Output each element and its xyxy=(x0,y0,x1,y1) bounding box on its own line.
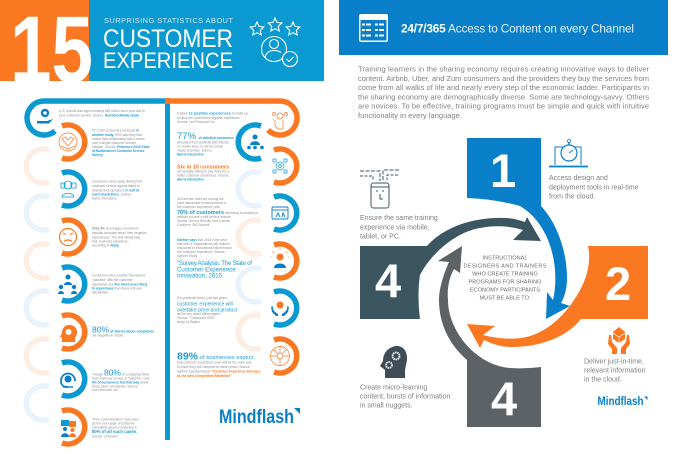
center text: ECONOMY PARTICIPANTS xyxy=(470,288,540,294)
text: customer experience will overtake: as the key brand differentiator. xyxy=(177,312,221,316)
icon: network target xyxy=(273,159,287,173)
text: six in 10: Six in 10 consumers xyxy=(177,164,229,170)
text: customer experience will overtake: overtake price and product xyxy=(177,308,238,314)
text: gartner says xyxy=(177,238,252,280)
text: customer experience will overtake: customer experience will xyxy=(177,302,233,308)
center text: INSTRUCTIONAL xyxy=(482,256,528,262)
text: self-service xyxy=(177,197,258,227)
text: only 4 percent: Only 4% of unhappy consumers xyxy=(92,226,139,230)
center text: WHO CREATE TRAINING xyxy=(472,272,538,278)
text: 80 percent superior xyxy=(92,368,150,392)
cycle: step 1 box and arrow xyxy=(467,138,570,319)
text: gartner says: resources to innovations that enhance xyxy=(177,246,232,250)
text: 77 percent: media channels. Source: xyxy=(177,148,213,152)
icon: people check xyxy=(58,274,77,294)
text: 80 percent superior: those same companies. Source: xyxy=(92,384,139,388)
text: six in 10: Harris Interactive. xyxy=(177,178,205,182)
intro paragraph: come from all walks of life and nearly every step of the economic ladder. Participants in xyxy=(358,83,649,92)
cycle: left dark 4 box and arrow: 4 xyxy=(375,254,401,307)
text: self-service: website to have a self-service feature. xyxy=(177,215,232,219)
text: customer experience will overtake: study by Walker xyxy=(177,320,201,324)
cycle: lower grey 4 box and arrow xyxy=(438,246,541,427)
text: step 4 bottom: in small nuggets. xyxy=(360,402,413,410)
text: step 2 xyxy=(584,358,646,384)
text: step 4 bottom xyxy=(360,384,450,410)
text: gartner says: Customer Experience xyxy=(177,266,236,274)
center text xyxy=(464,256,547,302)
text: billion lost: U.S. brands lose approximately $62 billion each year due to xyxy=(59,109,145,113)
title: EXPERIENCE xyxy=(103,48,233,73)
cycle: step 1 box and arrow: 1 xyxy=(490,144,516,197)
text: step 1: deployment tools in real-time xyxy=(549,184,639,192)
text: gartner says: "Survey Analysis: The State of xyxy=(177,260,252,267)
title xyxy=(103,16,233,73)
icon: devices with arrows xyxy=(360,170,399,208)
text: billion lost: poor customer service. Source: NewVoiceMedia study. xyxy=(59,114,140,118)
serpentine path: right column xyxy=(165,98,297,440)
text: 63 percent: of Multichannel Customer Service xyxy=(92,149,145,153)
title: SURPRISING STATISTICS ABOUT xyxy=(104,16,233,25)
text: satisfied customers xyxy=(92,274,147,294)
text: 80 percent superior: Lee Resource Inc. xyxy=(92,388,118,392)
text: 63 percent: Survey xyxy=(92,153,103,157)
intro paragraph: the sharing economy are demographically diverse. Some are technology-savvy. Others xyxy=(358,92,649,102)
heading: 24/7/365 Access to Content on every Channel xyxy=(401,22,634,36)
text: gartner says: Innovation, 2015. xyxy=(177,272,224,280)
intro paragraph: functionality in every language. xyxy=(358,111,462,120)
text: only 4 percent xyxy=(92,226,147,248)
cycle: step 2 box and arrow xyxy=(467,246,648,348)
text: only 4 percent: actually complain about their negative xyxy=(92,231,147,235)
cycle: lower grey 4 box and arrow: 4 xyxy=(491,372,517,425)
icon: head with gears xyxy=(380,346,407,378)
text: step 4 left: Ensure the same training xyxy=(360,215,438,222)
text: self-service: Customer 360 Summit xyxy=(177,223,209,227)
icon: people talking xyxy=(61,420,76,437)
text: failed to answer: Harris Interactive xyxy=(92,196,117,200)
icon: self-service browser xyxy=(272,207,288,219)
text: only 4 percent: their business elsewhere, xyxy=(92,240,129,244)
text: satisfied customers: experience are five times more likely xyxy=(92,282,147,286)
text: only 4 percent: according to Ruby. xyxy=(92,244,119,248)
big number 15: 15 xyxy=(10,0,93,103)
text: 12 positive experiences xyxy=(177,112,248,124)
text: satisfied customers: Customers who consider themselves xyxy=(92,274,145,278)
center text: PROGRAMS FOR SHARING xyxy=(468,280,542,286)
text: 77 percent: on review sites, or across social xyxy=(177,144,223,148)
title: CUSTOMER xyxy=(103,25,233,53)
icon: stars and customer xyxy=(250,18,300,66)
text: 63 percent: another study, 63% said they had xyxy=(92,133,142,137)
text: poor communication: as the root cause of customer xyxy=(92,422,136,426)
text: self-service: Self-service tools are among the xyxy=(177,197,224,201)
text: customer experience will overtake xyxy=(177,296,238,324)
text: 12 positive experiences: for just one unresolved negative experience. xyxy=(177,116,241,120)
text: poor communication: 80% of all such cases. xyxy=(92,429,137,434)
text: 63 percent: over a single customer service xyxy=(92,141,136,145)
text: six in 10 xyxy=(177,164,229,182)
icon: stopwatch on laptop xyxy=(549,140,588,166)
text: 77 percent: Harris Interactive. xyxy=(177,152,205,156)
text: gartner says: that half of organizations will redirect xyxy=(177,242,230,246)
serpentine path: left column xyxy=(26,101,165,444)
icon: money hands xyxy=(271,302,289,316)
text: 63 percent: mistake. Source: Pearson's 2016 State xyxy=(92,145,150,149)
logo: Mindflash: Mindflash xyxy=(219,406,294,428)
center text: MUST BE ABLE TO: xyxy=(480,296,531,302)
text: 12 positive experiences: Source: Lee Resource Inc xyxy=(177,120,215,124)
text: 77 percent: will share their positivity with friends, xyxy=(177,140,229,144)
text: 89 percent: in which they will compete for wallet share. Source: xyxy=(177,365,251,369)
text: step 1: from the cloud. xyxy=(549,194,595,200)
text: poor communication: complaints about a company in xyxy=(92,426,137,430)
text: step 1: Access design and xyxy=(549,175,608,182)
text: six in 10: are actually willing to pay more for a xyxy=(177,170,229,174)
text: 80 percent of tweets: are negative in nature. xyxy=(92,334,124,338)
text: failed to answer: such interactions. Source: xyxy=(92,192,132,196)
text: step 2: Deliver just-in-time, xyxy=(584,358,644,366)
icon: head with brain xyxy=(60,325,77,342)
text: 80 percent of tweets: 80% of Tweets about companies xyxy=(92,324,154,334)
text: step 2: in the cloud. xyxy=(584,376,622,384)
intro paragraph: are novices. To be effective, training programs must be simple and quick with intuitive xyxy=(358,102,649,110)
text: 89 percent: that customer experience soon will be the main way xyxy=(177,360,252,364)
text: 80 percent superior: Though 80% of companies think xyxy=(92,368,149,378)
text: step 2: relevant information xyxy=(584,368,646,374)
text: 12 positive experiences: It takes 12 positive experiences to make up xyxy=(177,112,248,116)
icon: broken hearts xyxy=(59,133,77,151)
text: 89 percent: of businesses expect xyxy=(200,355,253,361)
text: satisfied customers: to repurchase than those who are xyxy=(92,286,142,290)
icon: person and stars xyxy=(247,134,264,149)
icon: lightbulb person xyxy=(270,248,290,268)
text: 89 percent: as the New Competitive Battlefield" xyxy=(177,374,232,378)
icon: gear on hand xyxy=(37,110,53,124)
text: customer experience will overtake: Source: "Customers 2020" xyxy=(177,316,216,320)
text: step 4 left xyxy=(360,215,438,240)
text: gartner says: Gartner Study xyxy=(177,254,198,258)
cycle: left dark 4 box and arrow xyxy=(360,217,541,319)
text: self-service: the customer experience, with xyxy=(177,205,220,209)
text: customer experience will overtake: It is predicted that in just two years, xyxy=(177,296,228,300)
text: failed to answer: answer their questions in half of xyxy=(92,188,140,192)
text: self-service: 70% of customers expecting a company's xyxy=(177,210,258,216)
icon: headset xyxy=(61,374,75,387)
text: self-service: most demanded enhancements of xyxy=(177,201,226,205)
text: self-service: Source: Survey Results from Gartner xyxy=(177,219,231,223)
text: failed to answer: customer service agents failed to xyxy=(92,184,140,188)
icon: calendar grid xyxy=(359,14,388,42)
text: 63 percent: ended their relationship with a brand xyxy=(92,137,145,141)
logo: small Mindflash: Mindflash xyxy=(598,394,644,408)
text: poor communication xyxy=(92,418,139,438)
text: 77 percent xyxy=(177,131,234,156)
text: failed to answer xyxy=(92,180,142,200)
text: 89 percent: Gartner Special Report "Customer Experience Emerges xyxy=(177,370,261,374)
text: 80 percent superior: their customer service is "superior," only xyxy=(92,376,150,380)
text: satisfied customers: "satisfied" with the customer xyxy=(92,278,134,282)
icon: hand with people xyxy=(272,112,288,129)
text: 80 percent superior: 8% of consumers feel that way about xyxy=(92,380,148,384)
text: 77 percent: 77% of satisfied consumers xyxy=(177,131,234,142)
text: step 4 left: tablet, or PC. xyxy=(360,234,401,240)
text: 89 percent: 89% xyxy=(177,350,199,362)
text: billion lost xyxy=(59,109,145,118)
icon: customer wheel xyxy=(270,346,290,366)
text: step 4 left: experience via mobile, xyxy=(360,224,430,232)
icon: agent xyxy=(61,181,76,197)
text: poor communication: Source: Unknown xyxy=(92,434,118,438)
text: failed to answer: Customers came away feeling that xyxy=(92,180,142,184)
text: step 4 bottom: Create micro-learning xyxy=(360,384,427,392)
header: 24/7/365 access xyxy=(339,0,668,55)
text: gartner says: the customer experience. Source: xyxy=(177,250,226,254)
text: only 4 percent: experiences - the rest simply take xyxy=(92,236,141,240)
text: step 1 xyxy=(549,175,639,200)
text: poor communication: "Poor communication" was cited xyxy=(92,418,139,422)
intro paragraph xyxy=(358,64,650,120)
intro paragraph: content. Airbnb, Uber, and Zum consumers and the providers they buy the services from xyxy=(358,74,649,83)
text: gartner says: Gartner says that 2018 is the year xyxy=(177,238,228,242)
center text: DESIGNERS AND TRAINERS xyxy=(464,264,547,270)
icon: hands with cube xyxy=(608,327,630,354)
text: 63 percent xyxy=(92,128,150,157)
header banner: customer experience xyxy=(0,0,324,81)
cycle: step 2 box and arrow: 2 xyxy=(605,257,631,310)
text: satisfied customers: dissatisfied. xyxy=(92,290,109,294)
text: six in 10: better customer experience. Source: xyxy=(177,174,229,178)
icon: angry face xyxy=(60,228,76,246)
text: 63 percent: Of 1,000 consumers surveyed in xyxy=(92,128,139,132)
text: step 4 bottom: content, bursts of information xyxy=(360,394,450,400)
intro paragraph: Training learners in the sharing economy requires creating innovative ways to deliver xyxy=(358,64,650,74)
text: 89 percent xyxy=(177,350,261,378)
